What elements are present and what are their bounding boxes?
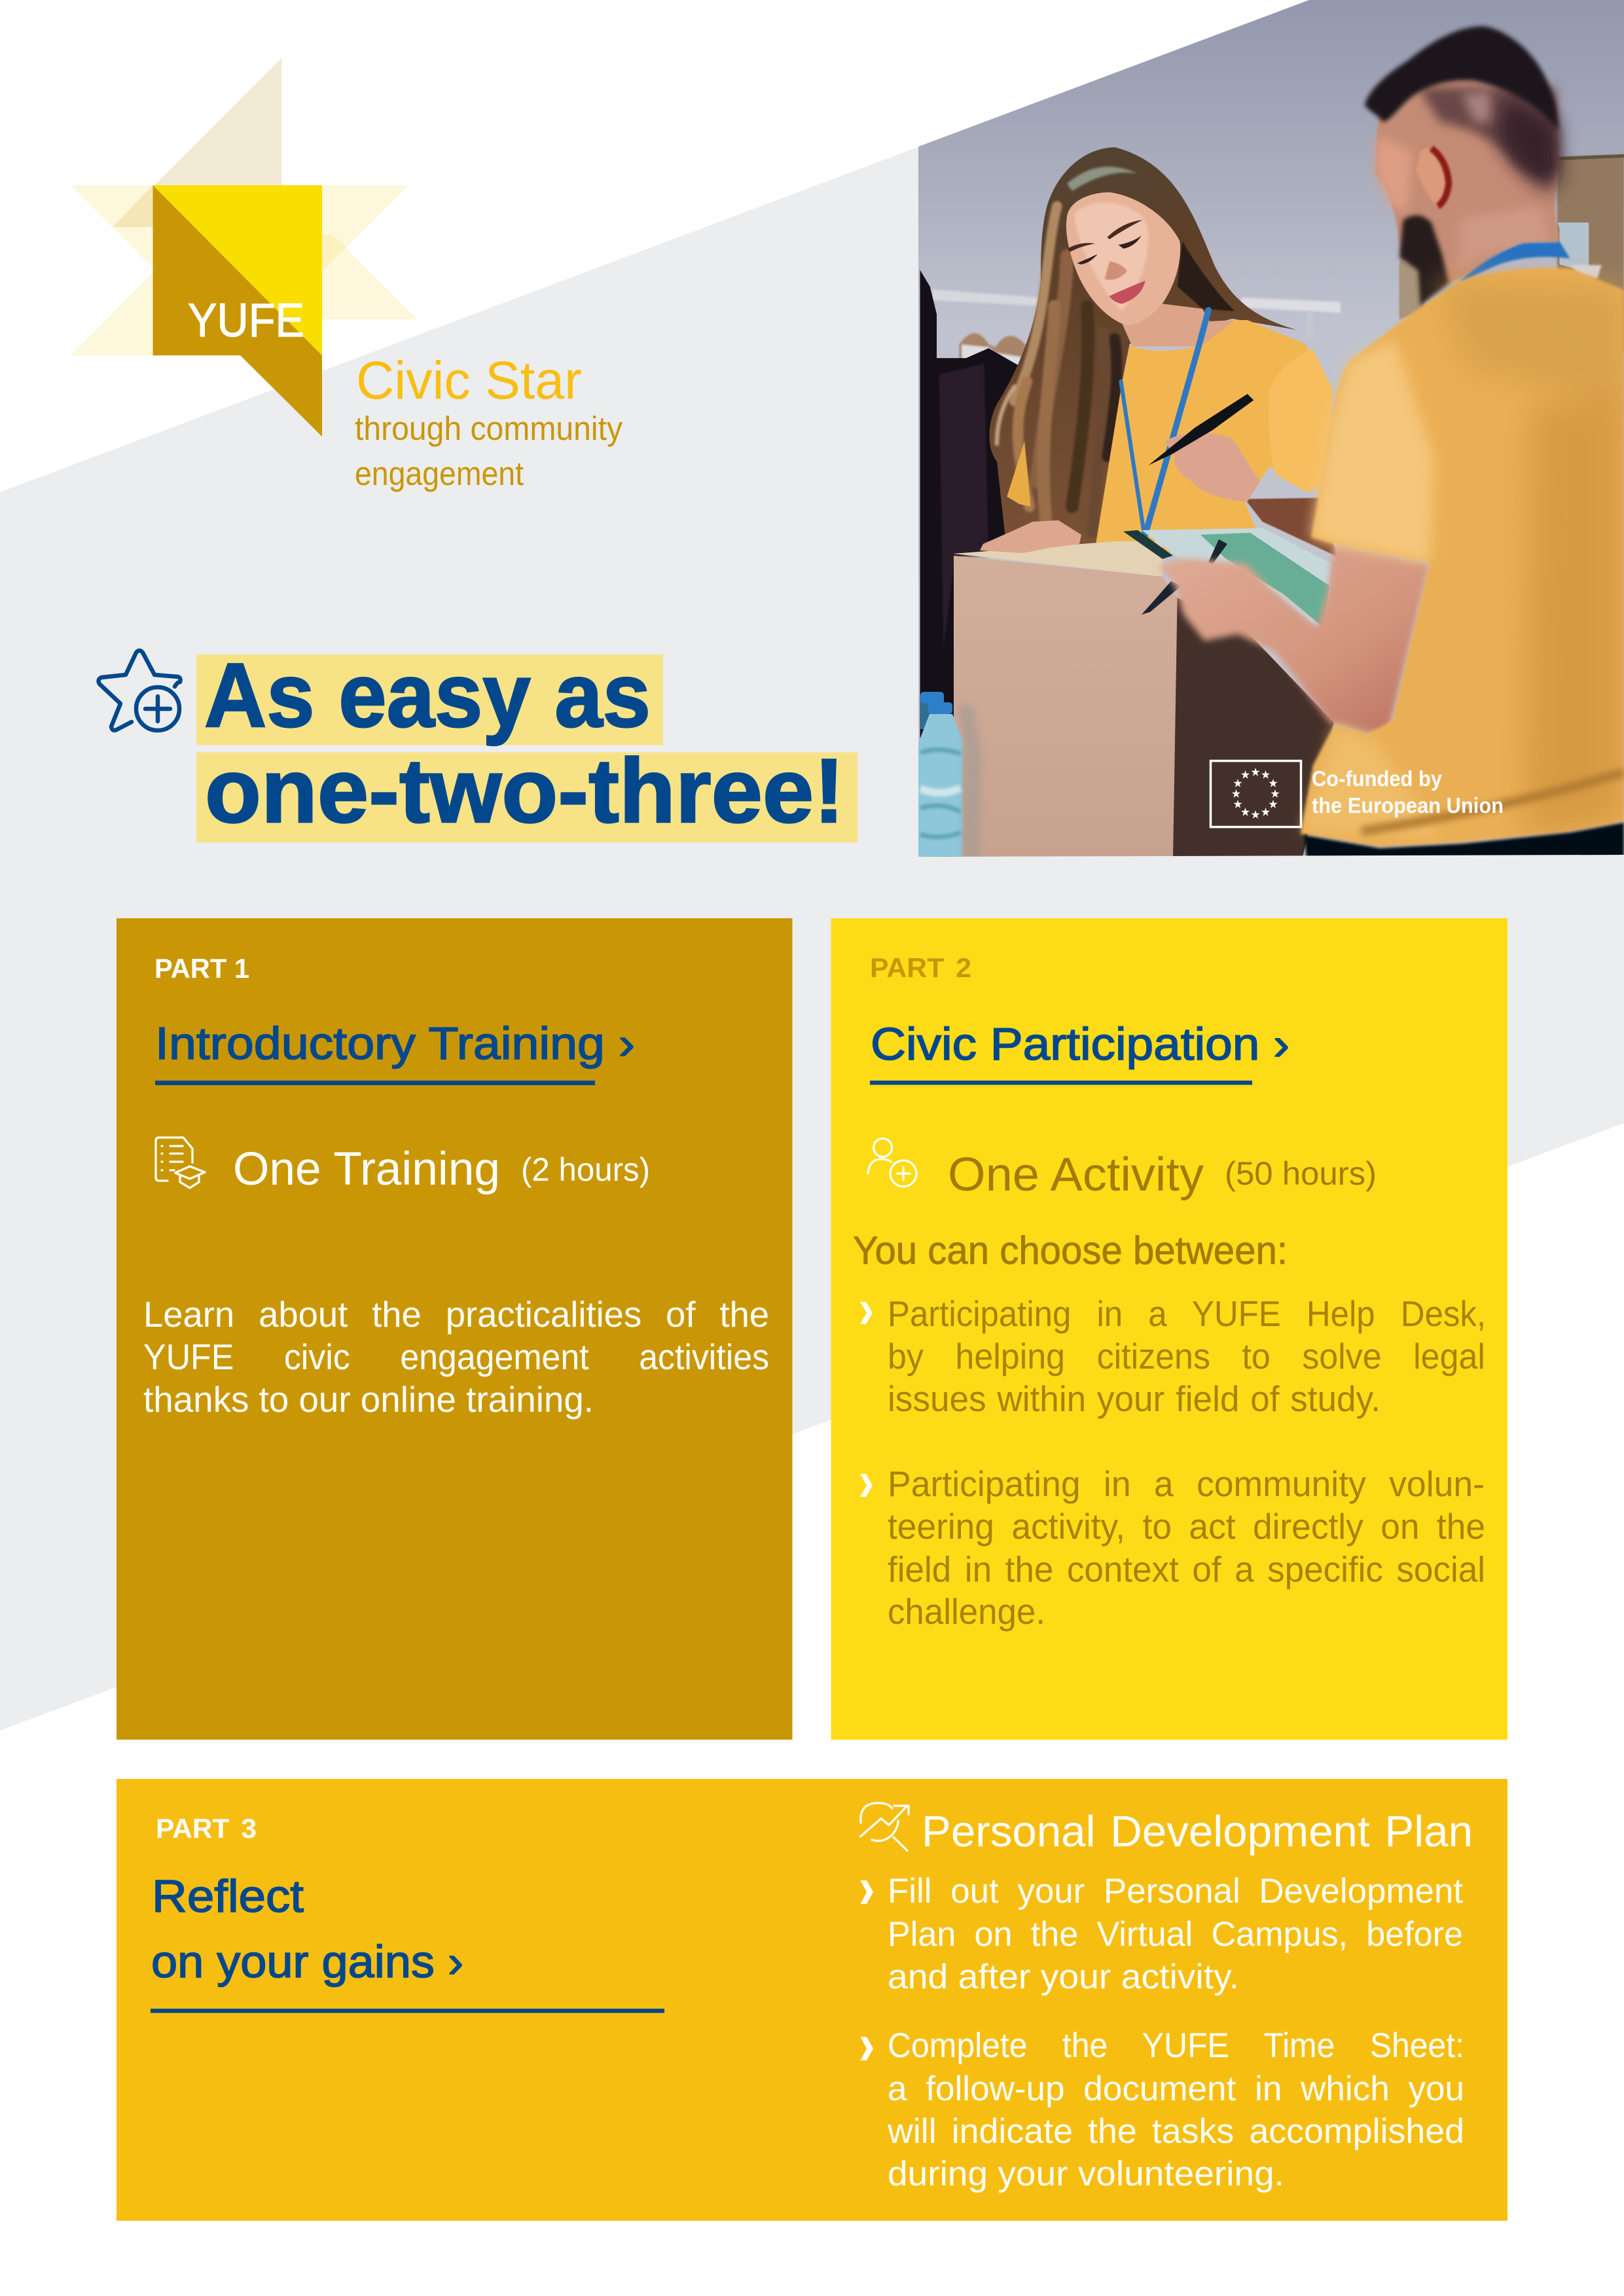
one activity: One Activity xyxy=(948,1149,1204,1201)
duration: (50 hours) xyxy=(1225,1155,1377,1192)
one training: One Training xyxy=(233,1143,500,1195)
description xyxy=(143,1294,769,1420)
heading: reflect on your gains: Reflect xyxy=(152,1871,304,1922)
bullet 2: field in the context of a specific social xyxy=(888,1549,1485,1589)
bullet 1: and after your activity. xyxy=(888,1958,1239,1996)
you can choose: You can choose between: xyxy=(853,1229,1288,1272)
box front xyxy=(954,556,1178,859)
heading underline xyxy=(870,1081,1252,1085)
duration: (2 hours) xyxy=(521,1151,650,1188)
pen in man's hand xyxy=(1142,581,1182,615)
bullet 1 xyxy=(860,1872,1463,1996)
box top xyxy=(953,541,1163,577)
man shirt shading xyxy=(1303,281,1624,838)
woman xyxy=(989,147,1337,557)
background: rack, clothes, boards xyxy=(920,154,1624,859)
bullet 2: a follow-up document in which you xyxy=(888,2070,1464,2108)
icon: document with graduation cap xyxy=(156,1138,205,1188)
man legs xyxy=(1304,823,1624,859)
bullet 1: issues within your field of study. xyxy=(888,1378,1380,1419)
heading: civic participation: Civic Participation › xyxy=(871,1018,1290,1069)
EU flag xyxy=(1211,761,1301,827)
man head xyxy=(1365,26,1602,315)
bullet 2: challenge. xyxy=(888,1591,1045,1632)
arm and hand with pen xyxy=(1245,498,1337,557)
wall xyxy=(916,0,1624,864)
heading: reflect on your gains: on your gains › xyxy=(151,1936,463,1987)
logo subtitle: engagement xyxy=(355,455,524,492)
description: thanks to our online training. xyxy=(143,1379,594,1420)
man arm and hand xyxy=(1159,544,1430,734)
icon: person with plus xyxy=(868,1139,916,1187)
bullet 1: by helping citizens to solve legal xyxy=(888,1336,1485,1376)
shirt xyxy=(1094,320,1333,552)
bullet 2: teering activity, to act directly on the xyxy=(888,1506,1485,1547)
bullet 2 xyxy=(860,1463,1485,1632)
photo: volunteers with box xyxy=(916,0,1624,864)
title: one-two-three! xyxy=(205,740,844,842)
clipboard xyxy=(1123,528,1331,628)
neck xyxy=(1122,304,1235,346)
face xyxy=(1066,192,1180,325)
label: part 2: PART 2 xyxy=(870,952,971,983)
icon: magnifier with chart xyxy=(860,1803,909,1851)
lanyard xyxy=(1121,310,1208,537)
bullet 2: Complete the YUFE Time Sheet: xyxy=(888,2026,1464,2065)
logo subtitle xyxy=(355,410,623,492)
hand on box xyxy=(980,520,1081,553)
heading underline xyxy=(151,2009,664,2013)
logo wordmark: YUFE xyxy=(188,295,304,347)
YUFE logo xyxy=(71,58,417,437)
water bottles xyxy=(918,692,981,857)
bullet 2: Participating in a community volun- xyxy=(888,1463,1485,1504)
diagonal grey band xyxy=(0,0,1624,1731)
label: part 1: PART 1 xyxy=(154,953,249,984)
EU co-funding emblem: the European Union xyxy=(1312,793,1504,817)
bullet 2 xyxy=(860,2026,1464,2193)
panel: part 3 xyxy=(117,1779,1507,2221)
description: Learn about the practicalities of the xyxy=(143,1294,769,1335)
icon: star with plus xyxy=(99,651,181,730)
EU co-funding emblem xyxy=(1211,761,1504,827)
heading underline xyxy=(155,1081,595,1085)
bullet 1 xyxy=(860,1293,1486,1419)
logo title: Civic Star xyxy=(356,351,582,410)
bullet 2: during your volunteering. xyxy=(888,2155,1284,2193)
hair strands xyxy=(997,206,1117,531)
panel: part 1 xyxy=(117,918,792,1740)
bullet 1: Participating in a YUFE Help Desk, xyxy=(888,1293,1486,1334)
personal development plan heading: Personal Development Plan xyxy=(922,1807,1473,1856)
title xyxy=(204,645,844,842)
bullet 2: will indicate the tasks accomplished xyxy=(887,2112,1464,2151)
title highlights xyxy=(196,655,857,842)
man shirt xyxy=(1301,268,1624,847)
heading: reflect on your gains xyxy=(151,1871,463,1987)
hair xyxy=(989,147,1297,552)
bullet 1: Plan on the Virtual Campus, before xyxy=(888,1915,1463,1954)
panel: part 2 xyxy=(831,918,1507,1740)
logo subtitle: through community xyxy=(355,410,623,447)
label: part 3: PART 3 xyxy=(156,1813,257,1844)
EU text: Co-funded by xyxy=(1312,766,1443,791)
title: As easy as xyxy=(204,645,651,746)
bullet 1: Fill out your Personal Development xyxy=(888,1872,1463,1910)
box side xyxy=(1172,598,1334,857)
description: YUFE civic engagement activities xyxy=(143,1336,769,1377)
heading: introductory training: Introductory Training › xyxy=(155,1018,635,1069)
